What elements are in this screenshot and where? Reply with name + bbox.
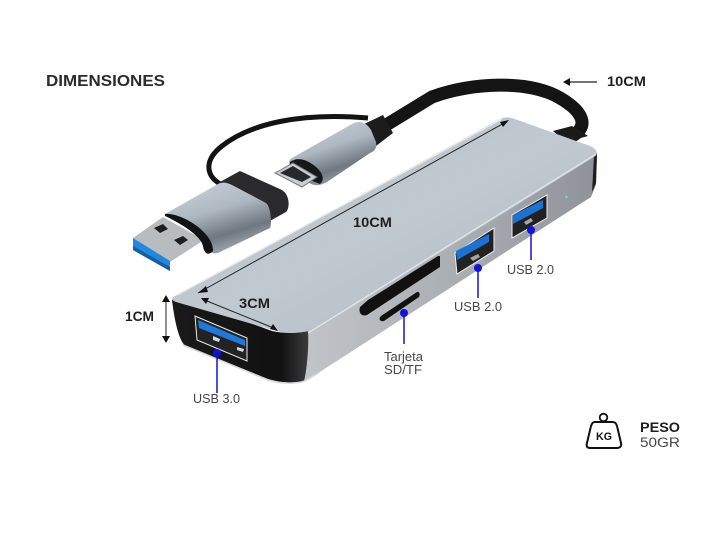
dimension arrow: 3cm [201,298,278,331]
top rim highlight [177,119,502,295]
long side face [296,151,597,381]
hub body [172,117,597,383]
USB 2.0 port middle [455,228,494,274]
black collar [218,171,289,222]
label: hub length 10CM: 10CM [353,214,392,230]
end face bottom highlight [183,345,320,383]
callout: Tarjeta SD/TF: SD/TF [384,363,422,377]
USB-A connector [133,171,289,271]
thin cable [209,116,368,185]
silver shell [133,217,204,262]
dimension arrow: 10cm along hub [198,120,509,293]
label: cable 10CM: 10CM [607,73,646,89]
label: 3CM: 3CM [239,295,270,311]
callout: USB 3.0: USB 3.0 [193,392,240,406]
USB-C connector [275,122,376,187]
callout: USB 2.0 right [507,226,554,277]
callout: Tarjeta SD/TF: Tarjeta [384,350,423,364]
icon: kg weight: KG [596,431,612,443]
callout: USB 2.0 middle [454,264,502,314]
weight label: 50GR [640,435,680,450]
black end face [172,297,308,382]
top face [172,117,597,333]
aluminium body [165,183,271,253]
dimension arrow: cable 10cm [563,78,597,86]
USB 3.0 port [195,316,247,361]
main cable [362,85,588,146]
weight label [640,420,680,450]
callout: USB 2.0 right: USB 2.0 [507,263,554,277]
icon: kg weight [587,414,621,448]
callout: Tarjeta SD/TF [384,309,423,377]
LED [565,196,568,198]
TF card slot [380,292,420,321]
callout: USB 3.0 [193,349,240,406]
strain relief [362,115,393,146]
weight label: PESO [640,420,680,435]
holes [154,224,168,233]
dimension arrow: 1cm [162,295,170,343]
right edge dark [592,153,597,192]
callout: USB 2.0 middle: USB 2.0 [454,300,502,314]
USB 2.0 port right [512,195,547,238]
SD card slot [359,256,440,316]
label: 1CM: 1CM [125,308,154,324]
title: DIMENSIONES [46,73,165,90]
